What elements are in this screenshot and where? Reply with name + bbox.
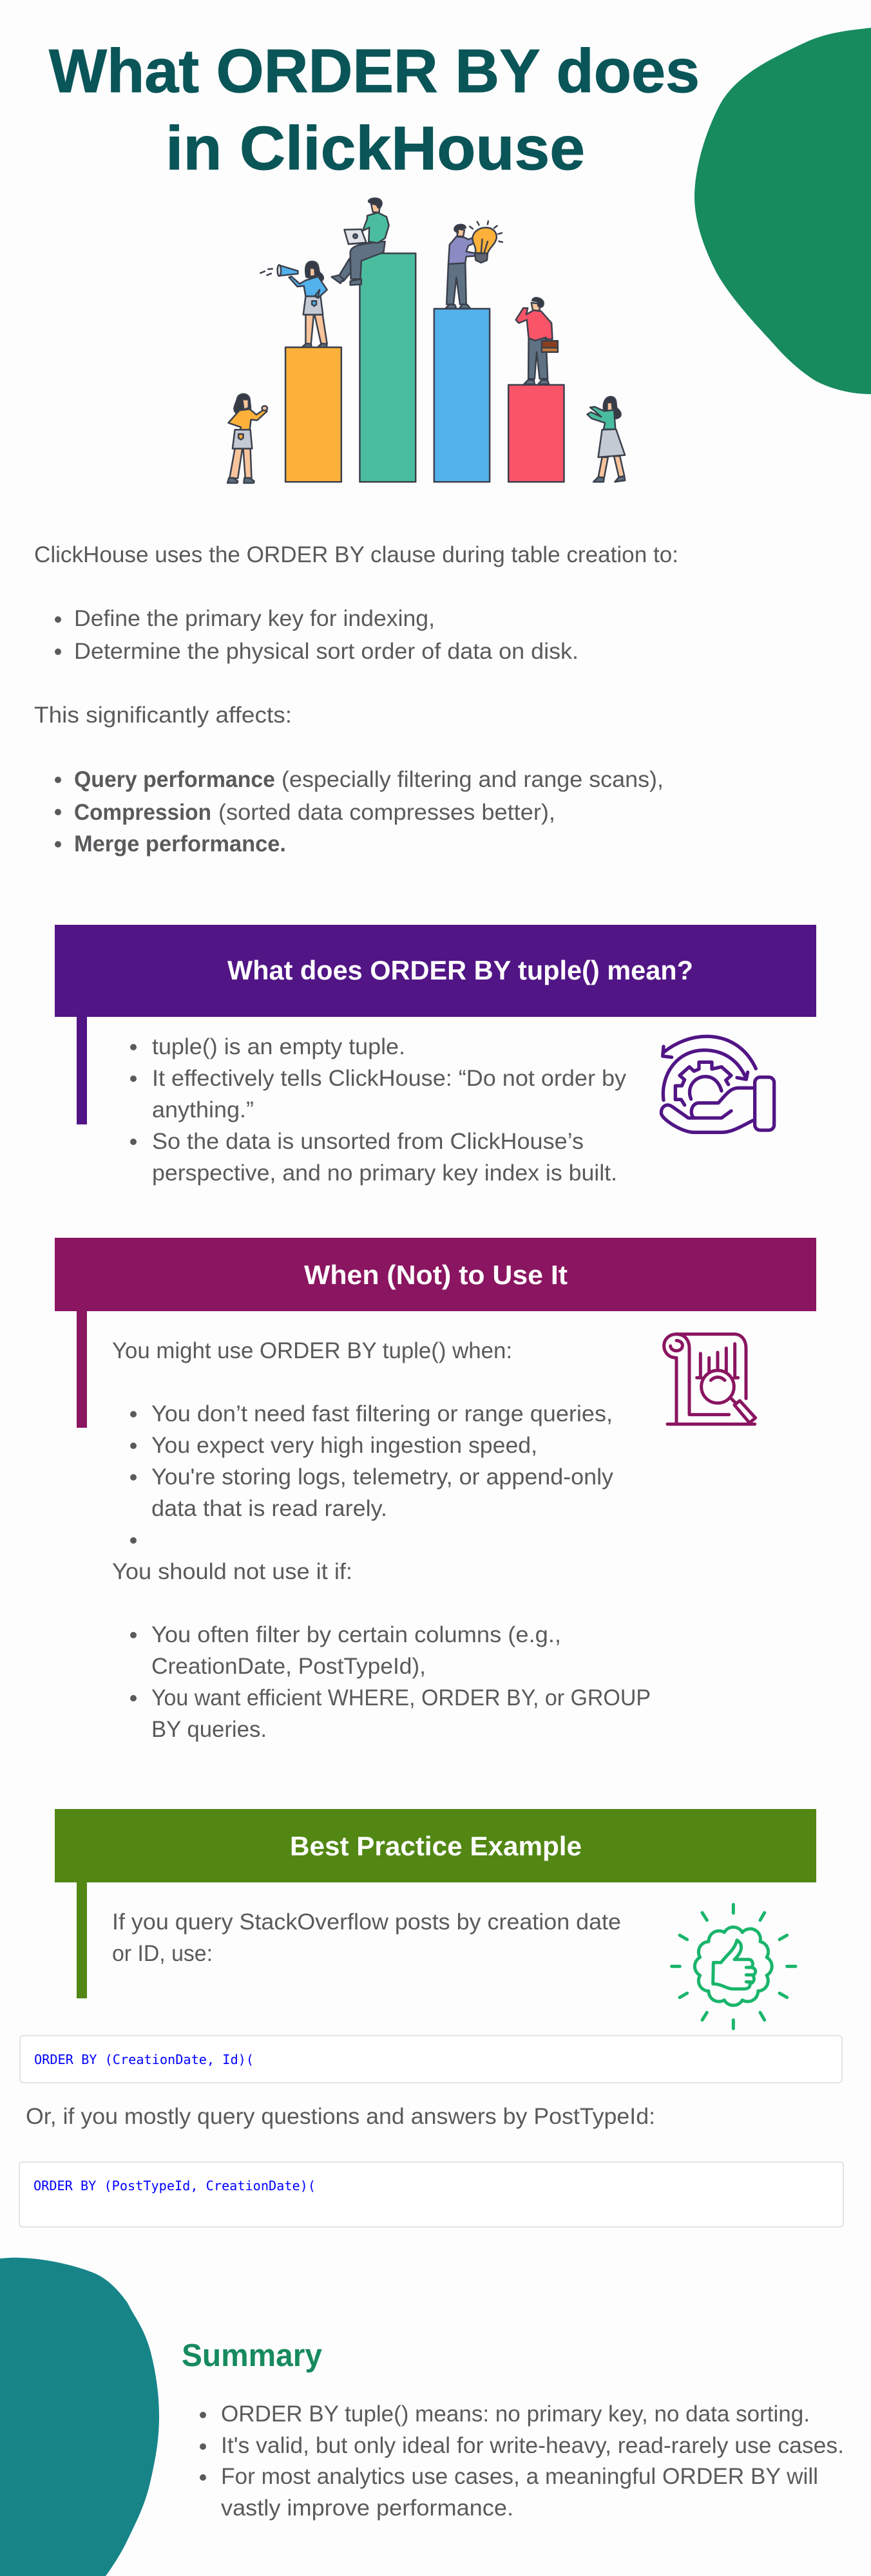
person: man with laptop — [332, 198, 389, 285]
bar: orange — [285, 347, 341, 482]
text: should not use: You want efficient WHERE, ORDER BY, or GROUP — [151, 1685, 651, 1710]
intro text: ClickHouse uses the ORDER BY clause during table creation to: — [34, 542, 678, 567]
icon: thumbs up badge — [672, 1904, 796, 2029]
bar: red — [508, 385, 564, 482]
panel bullet list — [130, 1034, 627, 1186]
text: should not use: You often filter by certain columns (e.g., — [151, 1622, 561, 1647]
code block: post type — [19, 2162, 843, 2227]
panel bullet list: perspective, and no primary key index is built. — [152, 1160, 617, 1186]
panel header — [55, 1238, 816, 1311]
code block: creation date — [20, 2036, 842, 2083]
text: might use: You're storing logs, telemetry, or append-only — [151, 1464, 613, 1490]
code block: post type: ORDER BY (PostTypeId, CreationDate)( — [34, 2178, 316, 2193]
text: should not use: BY queries. — [151, 1717, 267, 1742]
panel bullet list: So the data is unsorted from ClickHouse’s — [152, 1129, 584, 1154]
title: What ORDER BY does — [49, 37, 700, 106]
list: what ORDER BY defines: Determine the physical sort order of data on disk. — [74, 639, 579, 664]
list: what it affects — [55, 767, 664, 857]
panel heading: When (Not) to Use It — [304, 1260, 568, 1290]
text: might use: data that is read rarely. — [151, 1496, 387, 1521]
panel side bar — [77, 1311, 87, 1428]
panel: when (not) to use it — [55, 1238, 816, 1742]
panel text: or ID, use: — [112, 1941, 213, 1966]
decorative teal blob bottom left — [0, 2258, 159, 2576]
list: what it affects: Merge performance. — [74, 831, 286, 857]
text: might use: You don’t need fast filtering or range queries, — [151, 1401, 613, 1426]
bar: blue — [434, 308, 490, 482]
panel heading: Best Practice Example — [290, 1831, 582, 1861]
list: what it affects: Compression — [74, 800, 211, 825]
person: woman in green — [587, 397, 625, 482]
title — [49, 37, 700, 183]
panel bullet list: tuple() is an empty tuple. — [152, 1034, 405, 1059]
panel: summary — [182, 2338, 844, 2521]
summary bullet list: ORDER BY tuple() means: no primary key, no data sorting. — [221, 2401, 810, 2427]
text: might use — [112, 1338, 613, 1544]
panel text: If you query StackOverflow posts by creation date — [112, 1909, 621, 1935]
person: man with light bulb — [445, 221, 503, 308]
panel: what does ORDER BY tuple() mean — [55, 925, 816, 1186]
text: might use: You might use ORDER BY tuple() when: — [112, 1338, 512, 1363]
list: what ORDER BY defines: Define the primary key for indexing, — [74, 606, 435, 631]
panel side bar — [77, 1017, 87, 1124]
text: might use: You expect very high ingestion speed, — [151, 1433, 537, 1458]
panel text — [112, 1909, 621, 1966]
text: should not use: CreationDate, PostTypeId), — [151, 1654, 426, 1679]
text: post type alternative: Or, if you mostly query questions and answers by PostTypeId: — [26, 2104, 655, 2129]
intro text: This significantly affects: — [34, 703, 292, 728]
panel bullet list: anything.” — [152, 1097, 254, 1122]
illustration: people on a bar chart — [227, 198, 625, 483]
panel header — [55, 1809, 816, 1882]
list: what it affects: (especially filtering and range scans), — [282, 767, 664, 792]
icon: gear in hand — [661, 1036, 774, 1132]
decorative green blob top right — [694, 28, 871, 394]
summary bullet list: It's valid, but only ideal for write-heavy, read-rarely use cases. — [221, 2433, 844, 2458]
summary heading: Summary — [182, 2338, 322, 2373]
panel side bar — [77, 1882, 87, 1998]
panel header — [55, 925, 816, 1017]
icon: scroll with magnifier — [664, 1334, 756, 1424]
person: man in red with briefcase — [516, 298, 558, 384]
text: should not use: You should not use it if: — [112, 1559, 352, 1584]
summary bullet list: vastly improve performance. — [221, 2496, 513, 2521]
list: what ORDER BY defines — [55, 606, 579, 664]
text: should not use — [112, 1559, 651, 1742]
code block: creation date: ORDER BY (CreationDate, Id)( — [34, 2052, 254, 2067]
list: what it affects: Query performance — [74, 767, 275, 792]
panel: best practice example — [55, 1809, 816, 2029]
intro text — [34, 542, 678, 857]
person: woman with megaphone — [260, 261, 327, 347]
person: woman in orange — [227, 394, 267, 483]
panel bullet list: It effectively tells ClickHouse: “Do not order by — [152, 1066, 627, 1091]
summary bullet list — [200, 2401, 844, 2521]
panel heading: What does ORDER BY tuple() mean? — [227, 955, 693, 985]
title: in ClickHouse — [166, 114, 585, 183]
list: what it affects: (sorted data compresses better), — [218, 800, 555, 825]
bar: green — [359, 253, 416, 482]
summary bullet list: For most analytics use cases, a meaningful ORDER BY will — [221, 2464, 818, 2489]
